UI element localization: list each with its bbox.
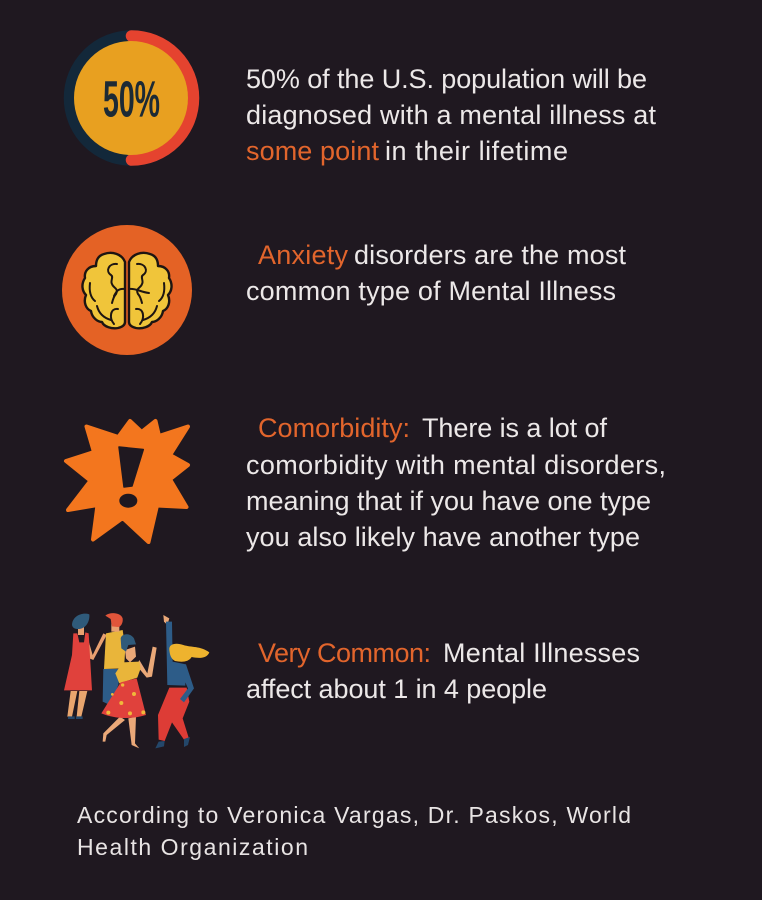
icon: 50% donut [70, 36, 194, 160]
text: anxiety statement: common type of Mental Illness [246, 276, 616, 306]
text: very common statement: affect about 1 in 4 people [246, 674, 547, 704]
text: comorbidity statement: you also likely have another type [246, 522, 640, 552]
person: woman in red dress [64, 614, 107, 719]
text: very common statement [246, 638, 640, 704]
text: 50 percent statement: 50% of the U.S. population will be [246, 64, 647, 94]
text: comorbidity statement: There is a lot of [422, 413, 607, 443]
text: anxiety statement: disorders are the most [354, 240, 626, 270]
text: comorbidity statement: meaning that if you have one type [246, 486, 651, 516]
person: woman in red skirt [101, 634, 157, 748]
icon: exclamation burst [66, 421, 188, 542]
icon: 50% donut: 50% [103, 70, 160, 128]
icon: group of people [64, 613, 209, 748]
text: 50 percent statement [246, 64, 656, 166]
person: man in yellow shirt [103, 613, 125, 705]
text: 50 percent statement: in their lifetime [385, 136, 568, 166]
text: anxiety statement [246, 240, 626, 306]
text: comorbidity statement [246, 413, 666, 552]
text: sources [77, 802, 631, 860]
person: woman with flowing yellow hair [155, 615, 209, 748]
text: anxiety statement: Anxiety [258, 240, 348, 270]
icon: brain [62, 225, 192, 355]
text: 50 percent statement: diagnosed with a mental illness at [246, 100, 656, 130]
text: very common statement: Very Common: [258, 638, 431, 668]
text: comorbidity statement: Comorbidity: [258, 413, 410, 443]
text: sources: According to Veronica Vargas, Dr. Paskos, World [77, 802, 631, 828]
text: sources: Health Organization [77, 834, 308, 860]
text: comorbidity statement: comorbidity with mental disorders, [246, 450, 666, 480]
text: 50 percent statement: some point [246, 136, 379, 166]
text: very common statement: Mental Illnesses [443, 638, 640, 668]
